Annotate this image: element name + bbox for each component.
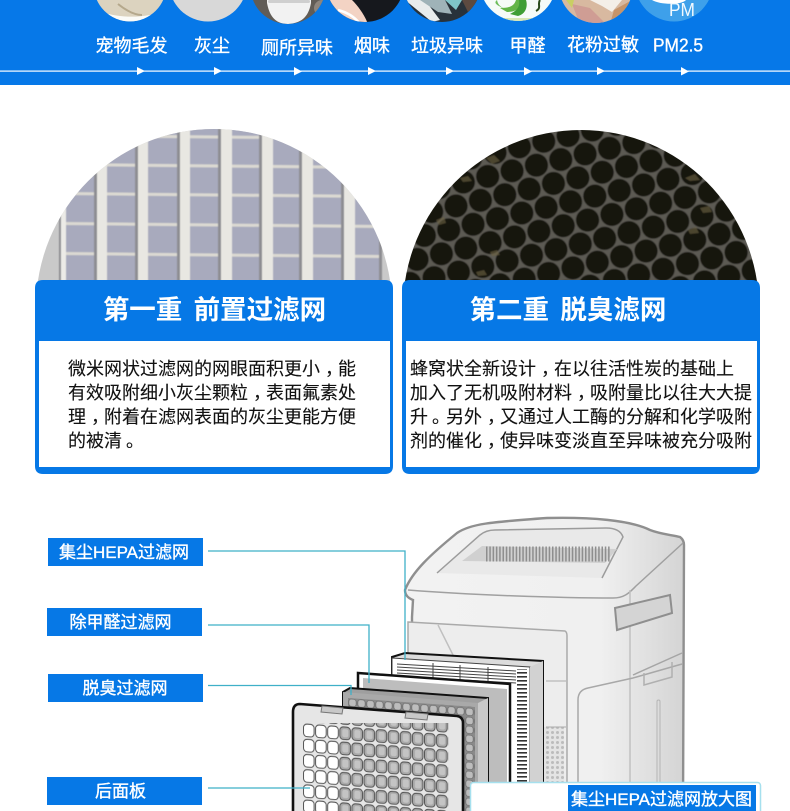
- label: HEPA filter: 集尘HEPA过滤网: [59, 543, 189, 562]
- heading: second filter: 第二重 脱臭滤网: [470, 295, 666, 325]
- illustration: air purifier body: [405, 518, 684, 811]
- text block: first filter: [68, 359, 356, 451]
- illustration: rear panel: [293, 704, 463, 811]
- header band: [0, 0, 790, 85]
- text block: first filter: 有效吸附细小灰尘颗粒 ，表面氟素处: [68, 383, 356, 403]
- category labels: 甲醛: [510, 36, 546, 56]
- category labels: 宠物毛发: [96, 36, 168, 56]
- category labels: 垃圾异味: [411, 36, 483, 56]
- category labels: [96, 35, 703, 58]
- icon: PM2.5: [635, 0, 713, 22]
- heading: first filter: 第一重 前置过滤网: [103, 295, 326, 325]
- text block: first filter: 微米网状过滤网的网眼面积更小 ，能: [68, 359, 356, 379]
- icon: formaldehyde: [484, 0, 552, 21]
- callout lines: [208, 551, 405, 788]
- icon: pollen allergy: [562, 0, 630, 23]
- category labels: 花粉过敏: [567, 35, 639, 55]
- label: deodorising filter: [48, 674, 203, 702]
- illustration: formaldehyde filter: [358, 673, 510, 811]
- illustration: HEPA filter: [392, 653, 543, 811]
- callout: HEPA filter enlarged view: [470, 782, 760, 811]
- callout: HEPA filter enlarged view: 集尘HEPA过滤网放大图: [571, 790, 752, 809]
- text block: second filter: 剂的催化 ，使异味变淡直至异味被充分吸附: [410, 431, 752, 451]
- category labels: PM2.5: [653, 36, 703, 56]
- text block: second filter: 加入了无机吸附材料 ，吸附量比以往大大提: [410, 383, 752, 403]
- label: rear panel: [47, 777, 202, 805]
- icon: dust: [169, 0, 247, 22]
- photo: mesh prefilter: [30, 125, 400, 285]
- label: formaldehyde filter: 除甲醛过滤网: [70, 613, 172, 632]
- illustration: deodorising filter: [343, 688, 488, 811]
- text block: second filter: 蜂窝状全新设计 ，在以往活性炭的基础上: [410, 359, 734, 379]
- rear filter bay: [408, 622, 567, 790]
- timeline with arrows: [0, 67, 790, 76]
- text block: second filter: [410, 359, 752, 451]
- icon: PM2.5: PM: [669, 0, 695, 20]
- icon: toilet odour: [253, 0, 323, 24]
- handle: [615, 595, 672, 630]
- label: formaldehyde filter: [47, 608, 202, 636]
- icon: cigarette smoke: [330, 0, 400, 22]
- category labels: 灰尘: [194, 36, 230, 56]
- text block: first filter: 理 ，附着在滤网表面的灰尘更能方便: [68, 407, 356, 427]
- label: HEPA filter: [48, 538, 203, 566]
- icon: pet hair: [96, 0, 164, 22]
- category labels: 厕所异味: [261, 38, 333, 58]
- panel: second filter: [402, 280, 760, 474]
- label: rear panel: 后面板: [95, 782, 146, 801]
- photo: honeycomb filter: [400, 125, 765, 285]
- panel: first filter: [35, 280, 393, 474]
- text block: second filter: 升。另外 ，又通过人工酶的分解和化学吸附: [410, 407, 752, 427]
- category labels: 烟味: [354, 36, 390, 56]
- air outlet grille: [462, 546, 617, 563]
- label: deodorising filter: 脱臭过滤网: [82, 679, 168, 698]
- text block: first filter: 的被清。: [68, 431, 144, 451]
- icon: rubbish odour: [407, 0, 478, 22]
